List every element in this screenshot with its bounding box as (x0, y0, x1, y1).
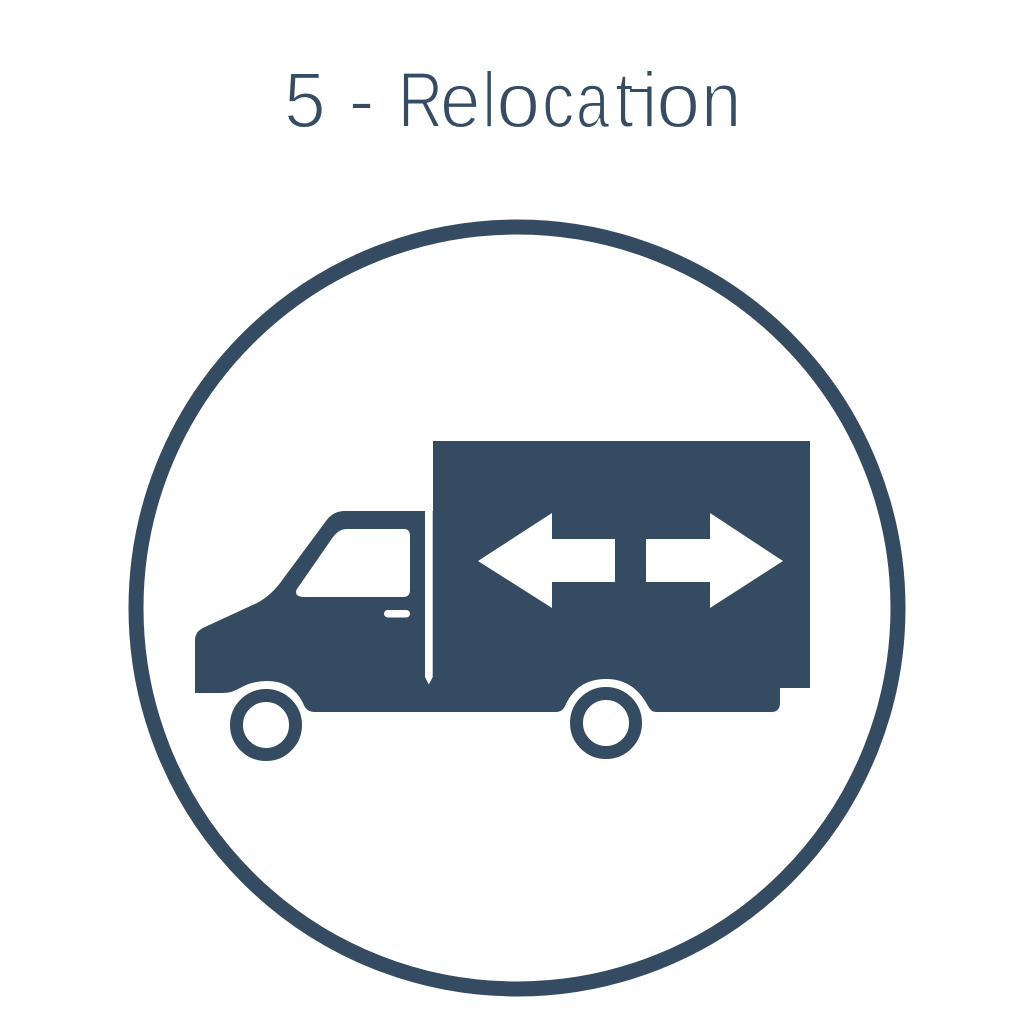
title: n (701, 55, 742, 144)
cab gap (425, 510, 433, 684)
cab window (296, 529, 410, 597)
title: i (642, 55, 657, 144)
door handle (384, 610, 410, 618)
title: c (542, 55, 574, 144)
title: e (440, 55, 481, 144)
title: o (496, 55, 540, 144)
left arrow (478, 513, 615, 608)
title: t (614, 55, 633, 144)
circle frame (136, 227, 898, 989)
title: o (656, 55, 700, 144)
title: a (576, 55, 609, 144)
rear wheel (576, 694, 636, 752)
front wheel (236, 696, 296, 754)
truck box (433, 441, 810, 712)
title: R (398, 55, 443, 144)
title: - (348, 55, 375, 144)
title: 5 (284, 55, 326, 144)
truck cab (195, 511, 433, 712)
icon: relocation truck (195, 441, 810, 754)
title (284, 55, 742, 144)
title: l (483, 55, 495, 144)
right arrow (646, 513, 783, 608)
